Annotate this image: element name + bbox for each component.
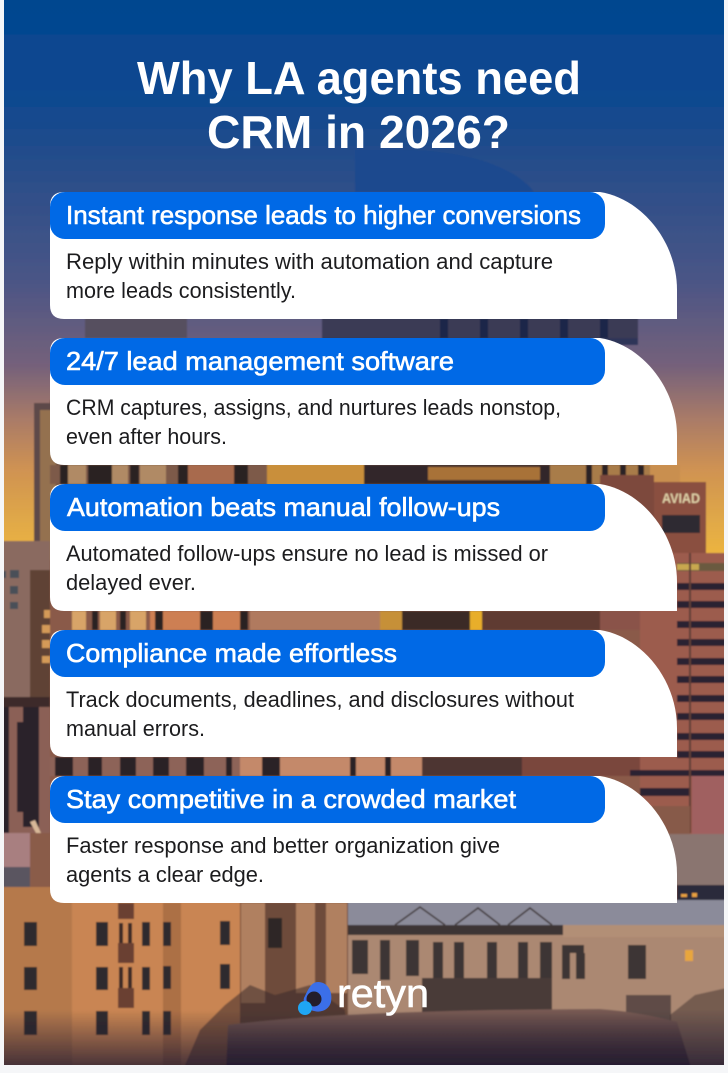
- panel: stay competitive: Faster response and better organization give: [66, 833, 500, 858]
- panel: compliance: Compliance made effortless: [66, 638, 397, 668]
- panel: instant response: more leads consistently.: [66, 278, 296, 303]
- panel: automation: [50, 484, 677, 611]
- panel: 24/7 lead management: [50, 338, 677, 465]
- panel: stay competitive: agents a clear edge.: [66, 862, 264, 887]
- panel: automation: Automation beats manual follow-ups: [67, 492, 500, 522]
- panel: stay competitive: [50, 776, 677, 903]
- AVIAD building: [653, 482, 706, 554]
- panel: instant response: Reply within minutes with automation and capture: [66, 249, 553, 274]
- title: [137, 52, 581, 158]
- panel: automation: Automated follow-ups ensure no lead is missed or: [66, 541, 548, 566]
- lower left orange building: [0, 887, 240, 1073]
- panel: instant response: [50, 192, 677, 319]
- panel: compliance: [50, 630, 677, 757]
- foreground dome roof: [226, 1008, 690, 1065]
- gap strip 2: [50, 465, 267, 484]
- mid gap strips: [50, 560, 680, 905]
- title: Why LA agents need: [137, 52, 581, 104]
- panel: compliance: manual errors.: [66, 716, 205, 741]
- panel: 24/7 lead management: even after hours.: [66, 424, 227, 449]
- background: city skyline photo: AVIAD: [662, 490, 700, 506]
- panel: automation: delayed ever.: [66, 570, 196, 595]
- left mid building: [0, 541, 50, 697]
- lower right capitol building: [348, 900, 728, 925]
- logo: retyn: [298, 972, 429, 1016]
- panel: stay competitive: Stay competitive in a crowded market: [66, 784, 517, 814]
- panel: compliance: Track documents, deadlines, and disclosures without: [66, 687, 574, 712]
- title: CRM in 2026?: [207, 106, 510, 158]
- trees: [185, 984, 346, 1065]
- logo: retyn: retyn: [337, 972, 429, 1016]
- stone columns: [239, 903, 349, 1024]
- tower silhouette behind the title: [355, 160, 533, 192]
- panel: 24/7 lead management: 24/7 lead management software: [66, 346, 454, 376]
- panel: 24/7 lead management: CRM captures, assigns, and nurtures leads nonstop,: [66, 395, 561, 420]
- panel: instant response: Instant response leads to higher conversions: [66, 200, 581, 230]
- right striped building: [640, 553, 728, 834]
